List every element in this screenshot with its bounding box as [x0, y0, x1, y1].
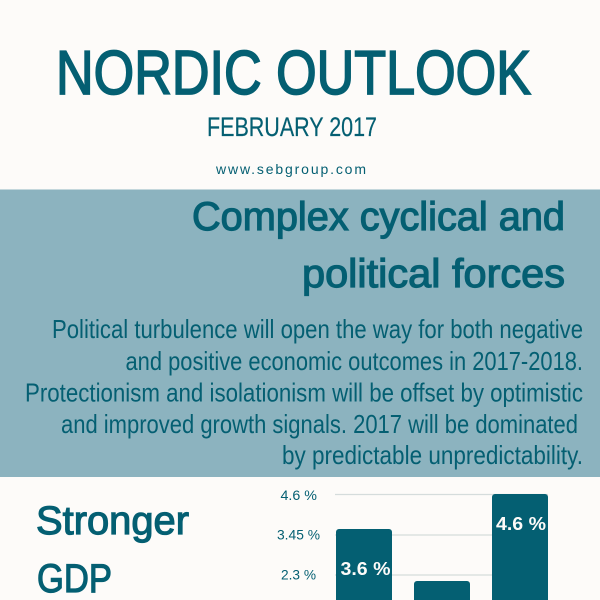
axis labels [277, 487, 320, 582]
axis labels: 2.3 % [281, 566, 316, 582]
heading: complex cyclical and political forces: Complex cyclical and [192, 195, 565, 239]
heading: complex cyclical and political forces: political forces [302, 252, 565, 296]
bar: 4.6 % [492, 494, 548, 600]
heading: stronger GDP: Stronger [36, 499, 189, 543]
heading: complex cyclical and political forces [192, 195, 565, 296]
bar: 3.6 % [336, 529, 392, 600]
date subtitle: FEBRUARY 2017 [207, 112, 377, 142]
value label: 4.6 %: 4.6 % [496, 514, 546, 534]
bar: middle [414, 581, 470, 600]
panel: complex cyclical and political forces [0, 190, 600, 477]
axis labels: 3.45 % [277, 526, 320, 542]
heading: stronger GDP [36, 499, 189, 600]
body text [25, 314, 583, 470]
bar chart: GDP growth [277, 487, 548, 600]
website: www.sebgroup.com [215, 161, 366, 177]
axis labels: 4.6 % [280, 487, 317, 503]
heading: stronger GDP: GDP [37, 557, 112, 600]
value label: 3.6 %: 3.6 % [340, 559, 390, 579]
